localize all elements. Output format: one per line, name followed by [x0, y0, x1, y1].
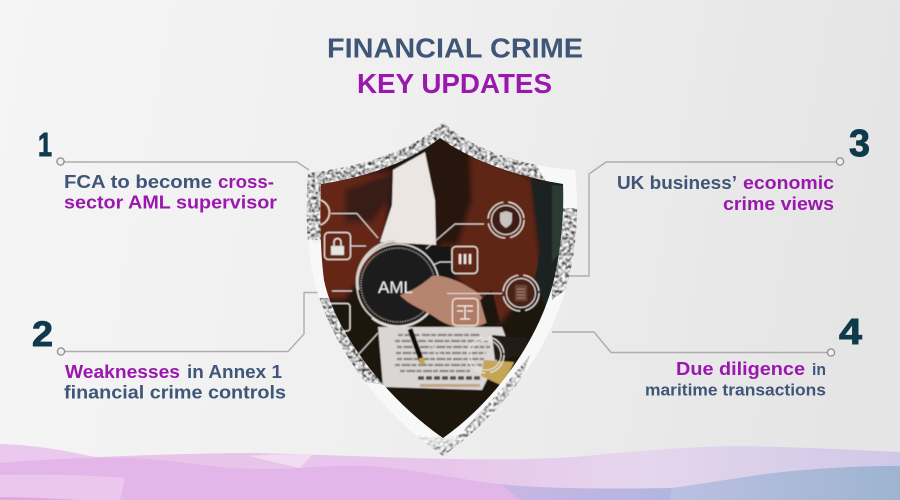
text block 4: in	[812, 361, 826, 379]
text block 2: in Annex 1	[187, 361, 282, 382]
connector 3	[568, 158, 844, 276]
text block 3: UK business’	[617, 172, 737, 193]
number 1: 1	[38, 126, 52, 163]
white shirt	[380, 152, 436, 245]
text block 4: maritime transactions	[645, 382, 826, 400]
pen	[410, 329, 422, 362]
connector 2	[57, 292, 318, 355]
icon: scales	[452, 298, 478, 326]
title	[327, 32, 583, 99]
document	[378, 327, 507, 390]
text block 3: economic	[743, 172, 834, 193]
text block 4	[645, 358, 826, 400]
hand	[400, 276, 488, 328]
icon: shield ring	[488, 202, 524, 238]
number 3: 3	[849, 123, 870, 165]
text block 1: cross-	[218, 171, 274, 192]
text block 1: sector AML supervisor	[64, 192, 277, 212]
dark background right	[530, 180, 563, 307]
text block 1	[64, 171, 277, 212]
text block 3: crime views	[723, 193, 834, 214]
number 4: 4	[839, 311, 862, 352]
icon: people	[452, 246, 478, 274]
central AML disc	[357, 241, 439, 327]
text block 3	[617, 172, 834, 214]
title: FINANCIAL CRIME	[327, 32, 583, 64]
text block 2	[64, 361, 286, 402]
title: KEY UPDATES	[357, 68, 552, 99]
icon: bottom ring	[468, 337, 504, 373]
shield photo	[320, 138, 564, 438]
text block 4: Due diligence	[676, 358, 805, 379]
text block 2: Weaknesses	[65, 361, 180, 382]
jacket and hair	[315, 136, 542, 325]
icon: document ring	[503, 275, 539, 311]
text block 2: financial crime controls	[64, 382, 286, 402]
shield	[306, 122, 578, 456]
icon: lock	[324, 232, 350, 260]
watercolour wave band	[0, 444, 900, 500]
AML label: AML	[378, 278, 413, 297]
gold gavel	[481, 360, 514, 386]
connector 4	[552, 332, 835, 356]
network lines	[331, 214, 502, 357]
number 2: 2	[32, 315, 53, 354]
connector 1	[57, 158, 309, 170]
text block 1: FCA to become	[64, 171, 212, 192]
icon: padlock box partial	[330, 302, 352, 333]
tablet	[414, 246, 453, 320]
shield frame	[306, 122, 578, 456]
icon: left ring partial	[320, 200, 329, 225]
